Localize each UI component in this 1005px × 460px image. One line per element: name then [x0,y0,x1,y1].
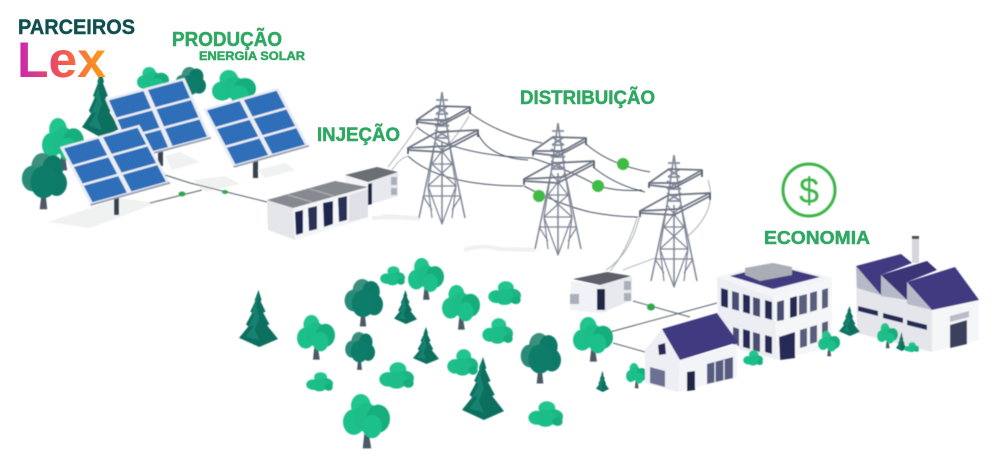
tree behind panels right [212,70,256,111]
solar panel right [203,88,309,168]
panel posts [114,148,258,215]
pine [839,306,860,336]
solar panel back left [105,78,211,160]
battery container [267,181,368,240]
tree [573,317,613,362]
light wires [388,116,710,271]
ground shadows [48,152,295,228]
office windows [721,288,828,360]
wires [408,113,650,217]
bush [380,266,405,285]
tree [345,279,383,327]
tree [877,323,898,348]
factory roofs [856,254,912,295]
tower 2 [524,123,594,255]
tree [297,315,335,360]
bush [482,318,513,344]
heading: distribuicao: DISTRIBUIÇÃO [520,87,655,109]
tree [626,363,647,388]
pine [394,290,417,324]
small pine [896,332,907,351]
bush [306,372,333,391]
heading: producao: PRODUÇÃO [172,28,282,51]
bush [528,401,563,427]
panel: forest [239,258,563,448]
tower shadow [382,216,535,250]
small inverter unit [345,167,398,205]
tree [343,394,390,448]
pine [413,327,439,364]
heading: economia: ECONOMIA [764,228,870,248]
panel: transmission towers [382,92,710,287]
cables [150,175,267,203]
logo line: lex: Lex [17,32,106,88]
icon: dollar coin: $ [799,170,819,211]
transformer [570,272,632,313]
tower 3 [640,155,710,287]
tree [345,332,375,370]
panel: consumers [570,236,979,392]
connector dots [178,190,228,196]
tree [818,331,840,356]
tree left upper [42,118,84,170]
service lines [610,301,717,352]
subheading: energia solar: ENERGIA SOLAR [199,49,305,63]
bush [379,362,414,389]
tree [521,333,561,383]
tree left lower [22,153,67,209]
factory gables [856,266,932,310]
energy dots [533,158,629,202]
connector dot [647,304,655,310]
small pine [596,371,609,392]
pine [462,357,504,420]
bush [447,349,478,376]
pine [239,290,278,347]
pine tree [82,70,120,138]
bush [743,350,763,366]
office building [717,262,832,360]
tower 1 [408,92,478,224]
logo line: parceiros: PARCEIROS [18,16,135,39]
logo [17,16,135,88]
station shadow [372,217,420,219]
icon: dollar coin [783,164,835,216]
tree [408,258,444,300]
panel: solar production [22,67,309,228]
heading: injecao: INJEÇÃO [317,124,400,146]
factory [856,236,979,352]
panel: injection station [267,167,420,240]
tree behind panels left [137,67,169,96]
house [645,313,738,392]
dark tree behind panels [175,67,206,102]
bush [904,342,919,352]
tree [442,285,480,330]
bush [488,281,521,305]
solar panel front [60,125,170,206]
